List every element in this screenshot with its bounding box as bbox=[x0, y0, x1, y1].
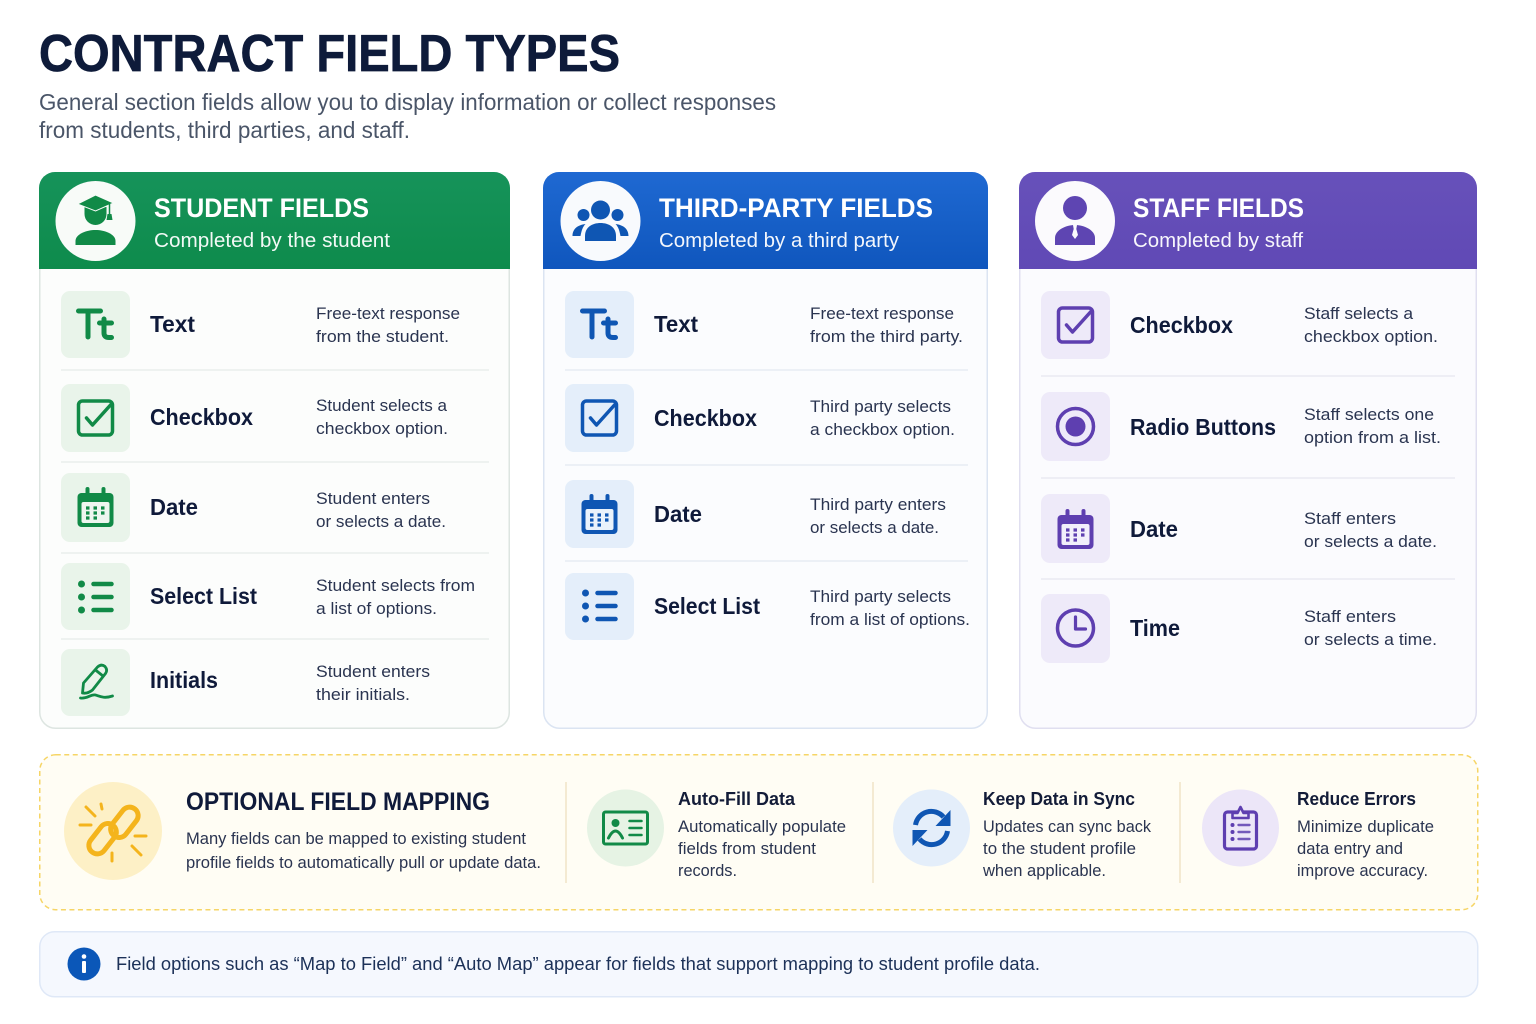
benefit: reduce errors: data entry and bbox=[1297, 839, 1403, 858]
icon: staff person bbox=[1055, 196, 1095, 245]
icon: graduate bbox=[76, 195, 116, 245]
row: checkbox: checkbox option. bbox=[316, 419, 448, 438]
benefit: keep data in sync: Keep Data in Sync bbox=[983, 788, 1135, 809]
row: select list: Student selects from bbox=[316, 576, 475, 595]
row: radio buttons: Radio Buttons bbox=[1130, 414, 1276, 440]
row: checkbox: Checkbox bbox=[1130, 312, 1233, 338]
row: date: or selects a date. bbox=[316, 512, 446, 531]
panel: staff fields bbox=[1019, 172, 1477, 728]
row: checkbox: Student selects a bbox=[316, 396, 448, 415]
row: date: Date bbox=[1130, 516, 1178, 542]
staff header: STAFF FIELDS bbox=[1133, 193, 1304, 223]
benefit: auto-fill data: records. bbox=[678, 861, 737, 880]
row: checkbox bbox=[1041, 291, 1438, 359]
row: text: from the third party. bbox=[810, 327, 963, 346]
mapping heading: OPTIONAL FIELD MAPPING bbox=[186, 788, 490, 816]
row: checkbox: Checkbox bbox=[654, 405, 757, 431]
row: select list: Select List bbox=[654, 593, 760, 619]
row: checkbox: Staff selects a bbox=[1304, 304, 1414, 323]
row: time: or selects a time. bbox=[1304, 630, 1437, 649]
row: checkbox bbox=[565, 384, 955, 452]
row: select list bbox=[565, 573, 970, 640]
row: text: Text bbox=[654, 311, 698, 337]
icon: broken link bbox=[64, 782, 162, 880]
row: time: Time bbox=[1130, 615, 1180, 641]
benefit: keep data in sync: to the student profile bbox=[983, 839, 1136, 858]
mapping description bbox=[186, 829, 541, 872]
row: initials: their initials. bbox=[316, 685, 410, 704]
row: text: Text bbox=[150, 311, 195, 337]
row: date: Student enters bbox=[316, 489, 430, 508]
row: date: Third party enters bbox=[810, 495, 946, 514]
row: select list: from a list of options. bbox=[810, 610, 970, 629]
row: time: Staff enters bbox=[1304, 607, 1396, 626]
benefit: reduce errors: improve accuracy. bbox=[1297, 861, 1428, 880]
row: text bbox=[61, 291, 460, 358]
panel: third-party fields bbox=[543, 172, 988, 728]
row: date: Date bbox=[150, 494, 198, 520]
benefit: auto-fill data: Auto-Fill Data bbox=[678, 788, 796, 809]
student header bbox=[39, 172, 510, 269]
row: initials: Initials bbox=[150, 667, 218, 693]
third-party header: Completed by a third party bbox=[659, 230, 899, 252]
benefit: reduce errors bbox=[1202, 788, 1434, 880]
mapping description: Many fields can be mapped to existing student bbox=[186, 829, 526, 848]
row: text bbox=[565, 291, 963, 358]
staff header bbox=[1019, 172, 1477, 269]
student header: STUDENT FIELDS bbox=[154, 193, 369, 223]
student header: Completed by the student bbox=[154, 230, 390, 252]
row: select list bbox=[61, 563, 475, 630]
row: date: or selects a date. bbox=[1304, 532, 1437, 551]
row: checkbox: Checkbox bbox=[150, 404, 253, 430]
row: select list: a list of options. bbox=[316, 599, 437, 618]
benefit: keep data in sync bbox=[893, 788, 1151, 880]
row: text: from the student. bbox=[316, 327, 449, 346]
row: text: Free-text response bbox=[810, 304, 954, 323]
row: time bbox=[1041, 594, 1437, 663]
benefit: auto-fill data: fields from student bbox=[678, 839, 816, 858]
row: radio buttons: option from a list. bbox=[1304, 428, 1441, 447]
row: select list: Third party selects bbox=[810, 587, 951, 606]
subtitle: from students, third parties, and staff. bbox=[39, 117, 410, 143]
row: initials: Student enters bbox=[316, 662, 430, 681]
row: text: Free-text response bbox=[316, 304, 460, 323]
row: select list: Select List bbox=[150, 583, 257, 609]
row: checkbox: Third party selects bbox=[810, 397, 951, 416]
row: date: Staff enters bbox=[1304, 509, 1396, 528]
row: checkbox: checkbox option. bbox=[1304, 327, 1438, 346]
icon: people bbox=[572, 200, 628, 241]
row: checkbox bbox=[61, 384, 448, 452]
third-party header: THIRD-PARTY FIELDS bbox=[659, 193, 933, 223]
row: date bbox=[565, 480, 946, 548]
benefit: keep data in sync: when applicable. bbox=[982, 861, 1106, 880]
mapping description: profile fields to automatically pull or update data. bbox=[186, 853, 541, 872]
row: date bbox=[1041, 494, 1437, 563]
panel: student fields bbox=[39, 172, 510, 728]
row: radio buttons bbox=[1041, 392, 1441, 461]
panel: optional field mapping bbox=[40, 755, 1478, 910]
row: date: or selects a date. bbox=[810, 518, 939, 537]
row: radio buttons: Staff selects one bbox=[1304, 405, 1434, 424]
benefit: keep data in sync: Updates can sync back bbox=[983, 817, 1151, 836]
row: initials bbox=[61, 649, 430, 716]
row: date bbox=[61, 473, 446, 542]
third-party header bbox=[543, 172, 988, 269]
staff header: Completed by staff bbox=[1133, 230, 1303, 252]
title: CONTRACT FIELD TYPES bbox=[39, 25, 620, 83]
row: date: Date bbox=[654, 501, 702, 527]
subtitle bbox=[39, 89, 776, 143]
benefit: auto-fill data bbox=[587, 788, 846, 880]
subtitle: General section fields allow you to display information or collect responses bbox=[39, 89, 776, 115]
icon: info bbox=[68, 948, 100, 980]
benefit: reduce errors: Reduce Errors bbox=[1297, 788, 1416, 809]
row: checkbox: a checkbox option. bbox=[810, 420, 955, 439]
benefit: auto-fill data: Automatically populate bbox=[678, 817, 846, 836]
note text: Field options such as “Map to Field” and “Auto Map” appear for fields that support mapping to student profile data. bbox=[116, 954, 1040, 974]
info note bbox=[40, 932, 1478, 997]
benefit: reduce errors: Minimize duplicate bbox=[1297, 817, 1434, 836]
